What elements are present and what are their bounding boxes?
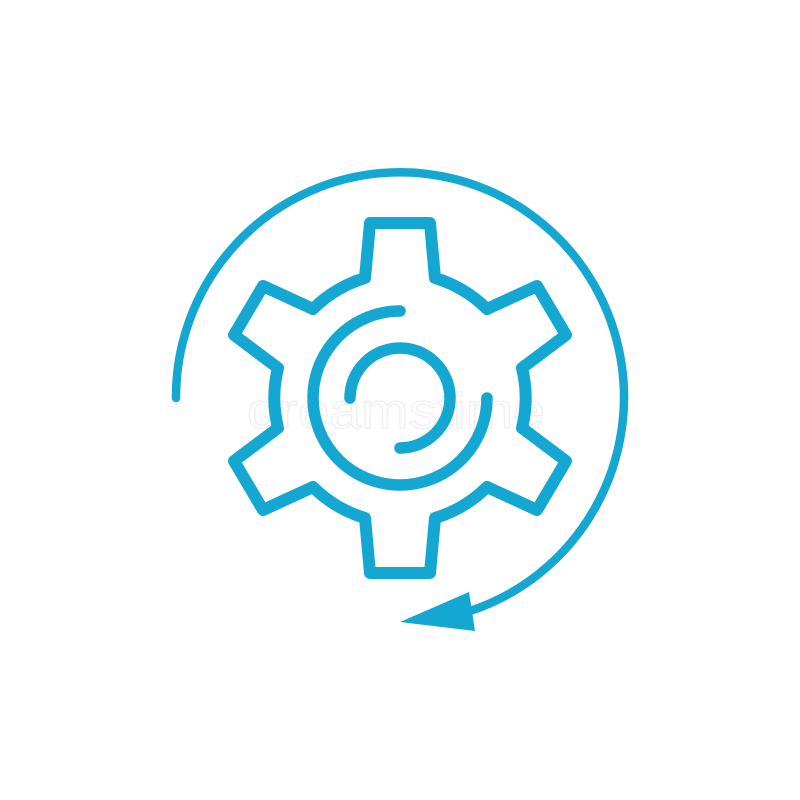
watermark text: dreamstime: [247, 383, 545, 439]
icon: gear outline: [234, 223, 566, 573]
icon: inner ring of gear hub: [350, 348, 450, 448]
icon: outer ring of gear hub: [313, 311, 487, 485]
arrow: circular rotation arrow: [176, 172, 624, 631]
